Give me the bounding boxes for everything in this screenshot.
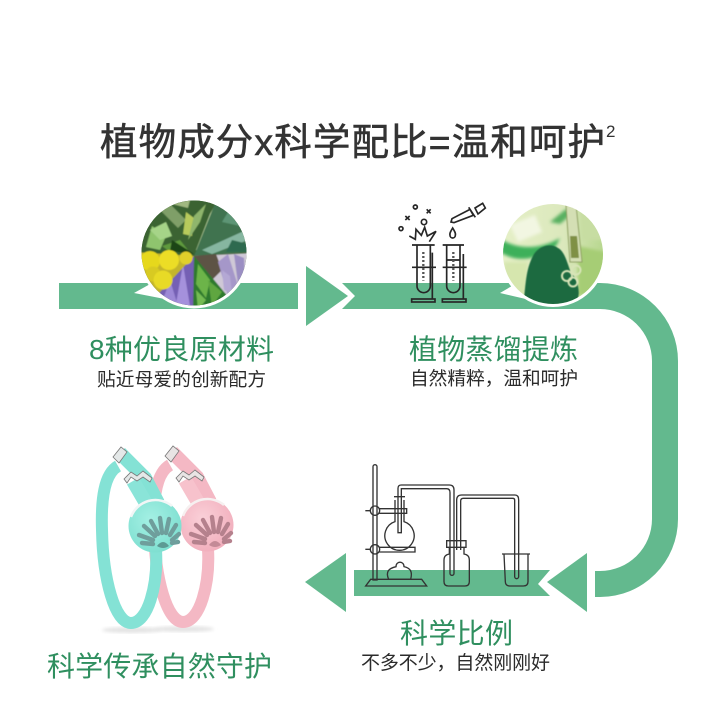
heading: natural protection: 科学传承自然守护: [47, 651, 272, 682]
title: 植物成分x科学配比=温和呵护: [100, 121, 605, 163]
dropper: [451, 203, 485, 223]
sparks: [405, 209, 431, 220]
heading: ratio: 科学比例: [400, 618, 513, 649]
heading: 8 ingredients: 8种优良原材料: [89, 334, 274, 365]
stand pole and base: [366, 465, 427, 586]
subtext: ratio: 不多不少，自然刚刚好: [361, 652, 550, 674]
photo: plant ingredients pie: [134, 196, 250, 312]
title: 2: [606, 122, 615, 141]
arrow: step 3 to step 4: [305, 553, 346, 612]
bar: step 1 green band: [59, 283, 298, 309]
icon: test tubes and dropper: [399, 203, 485, 302]
stand base left: [412, 299, 435, 302]
bar: curved green band from step 2 to step 3: [342, 283, 678, 597]
burst: [409, 227, 436, 242]
photo: green powder and pipette: [500, 204, 603, 307]
delivery tube 2: [457, 495, 519, 579]
stand base right: [442, 299, 466, 302]
arrow: curve into step 3: [547, 553, 587, 612]
arrow: step 1 to step 2: [306, 266, 348, 326]
clamps: [365, 506, 415, 554]
bar: step 3 green band: [354, 570, 550, 596]
subtext: ingredients: 贴近母爱的创新配方: [97, 369, 266, 390]
product: teal bracelet: [102, 447, 182, 633]
graduation marks: [423, 252, 453, 281]
subtext: distillation: 自然精粹，温和呵护: [410, 368, 578, 389]
delivery tube 1: [398, 485, 454, 575]
bottle: [444, 541, 469, 586]
burner: [387, 562, 411, 579]
heading: distillation: 植物蒸馏提炼: [409, 334, 578, 365]
icon: distillation apparatus: [365, 465, 530, 586]
bubbles: [399, 205, 427, 231]
infographic canvas: [48, 122, 678, 679]
product: pink bracelet: [154, 446, 234, 632]
flask: [385, 497, 414, 550]
test tube right: [443, 245, 467, 299]
beaker: [502, 554, 530, 586]
test tube left: [412, 245, 436, 299]
drop: [450, 228, 456, 238]
